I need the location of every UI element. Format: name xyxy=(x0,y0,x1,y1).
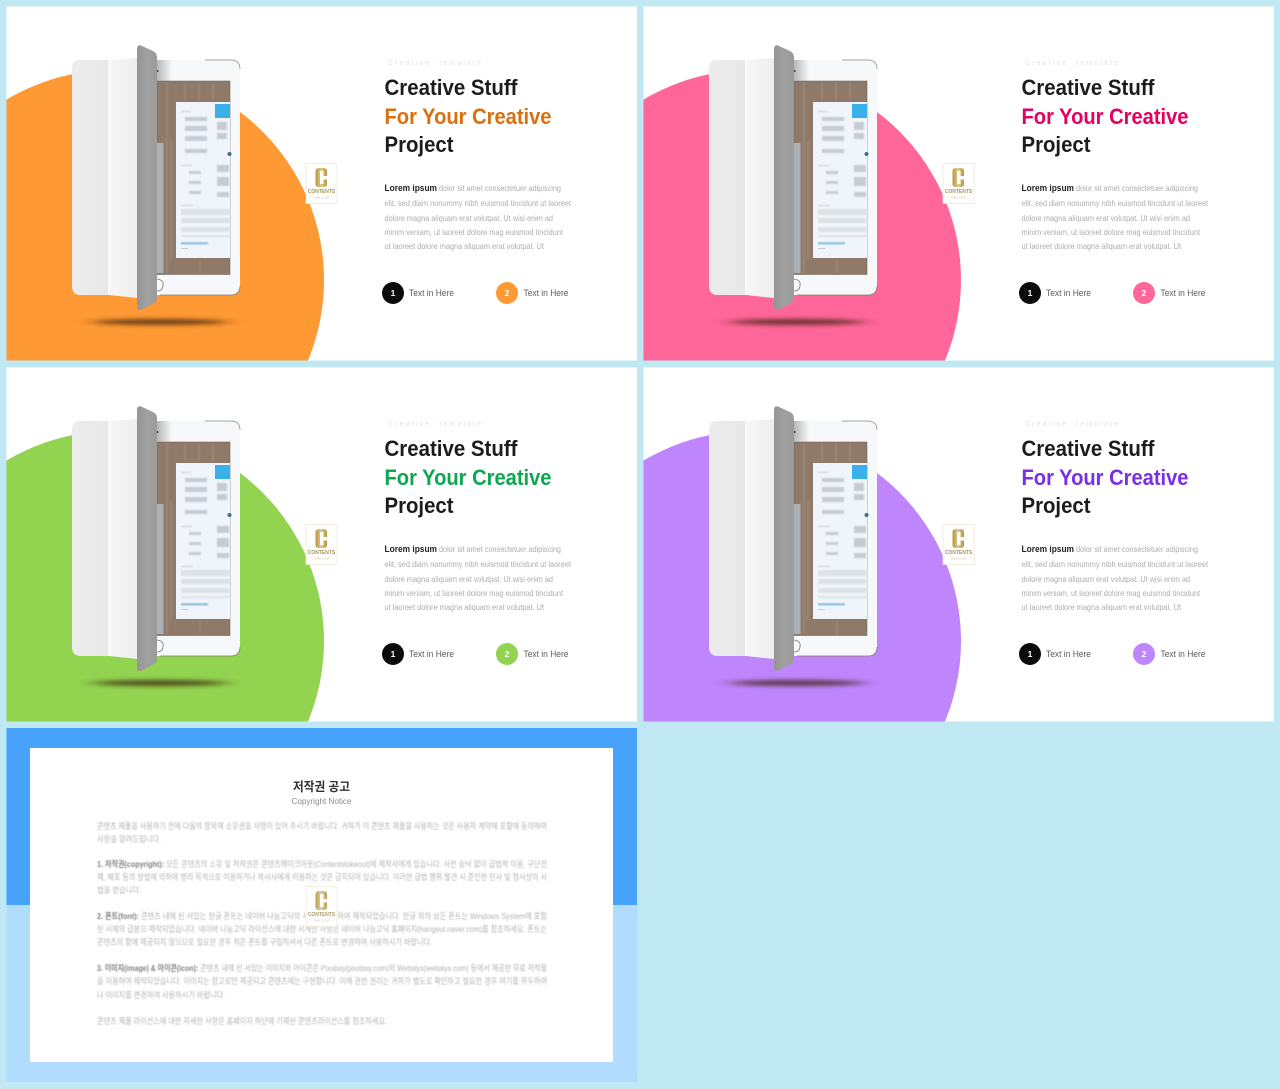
logo badge: CONTENTS xyxy=(308,550,336,556)
item 1: Text in Here xyxy=(409,649,454,659)
item 2 xyxy=(496,643,568,665)
body text: elit, sed diam nonummy nibh euismod tincidunt ut laoreet xyxy=(384,198,572,208)
heading xyxy=(1022,75,1188,157)
logo badge: CONTENTS xyxy=(945,550,973,556)
item 1: Text in Here xyxy=(409,288,454,298)
heading: For Your Creative xyxy=(384,104,552,129)
body text: minim veniam, ut laoreet dolore mag euismod tincidunt xyxy=(384,227,564,237)
item 1: 1 xyxy=(391,649,396,659)
section 1: copyright xyxy=(97,859,547,895)
item 2 xyxy=(496,282,568,304)
heading: Creative Stuff xyxy=(1022,436,1155,461)
section 3: image and icon: 나 이미지를 변경하여 사용하시기 바랍니다. xyxy=(97,990,225,1000)
notice intro: 사항을 알려드립니다. xyxy=(97,834,161,844)
section 2: font xyxy=(97,911,547,947)
body text xyxy=(1022,544,1209,612)
logo badge: MAIL.COM xyxy=(951,556,966,560)
icon: tablet mockup xyxy=(709,406,877,686)
item 2: 2 xyxy=(1142,288,1147,298)
panel: green creative slide xyxy=(6,368,637,722)
section 3: image and icon xyxy=(97,963,547,1000)
logo badge xyxy=(306,886,337,926)
item 2: Text in Here xyxy=(524,649,568,659)
heading: Project xyxy=(384,132,454,157)
heading xyxy=(384,436,552,518)
item 2: 2 xyxy=(505,649,510,659)
heading xyxy=(1022,436,1188,518)
logo badge: MAIL.COM xyxy=(314,918,329,922)
decorative purple circle xyxy=(644,435,961,722)
body text: dolor sit amet consectetuer adipiscing xyxy=(439,544,561,554)
body text: elit, sed diam nonummy nibh euismod tincidunt ut laoreet xyxy=(1022,198,1209,208)
closing note: 콘텐츠 제품 라이선스에 대한 자세한 사항은 홈페이지 하단에 기재된 콘텐츠라이선스를 참조하세요. xyxy=(97,1016,387,1026)
logo badge: CONTENTS xyxy=(308,189,336,195)
notice subtitle: Copyright Notice xyxy=(292,796,352,806)
item 1: 1 xyxy=(1028,288,1033,298)
heading: For Your Creative xyxy=(1022,104,1188,129)
item 1: 1 xyxy=(1028,649,1033,659)
logo badge: MAIL.COM xyxy=(314,556,329,560)
body text: dolore magna aliquam erat volutpat. Ut wisi enim ad xyxy=(384,574,553,584)
body text: dolore magna aliquam erat volutpat. Ut wisi enim ad xyxy=(384,213,553,223)
body text xyxy=(384,183,572,251)
body text xyxy=(1022,183,1209,251)
body text: ut laoreet dolore magna aliquam erat volutpat. Ut xyxy=(384,241,545,251)
logo badge xyxy=(943,524,974,564)
eyebrow label: Creative template xyxy=(388,421,481,428)
item 2 xyxy=(1133,282,1206,304)
section 3: image and icon: 3. 이미지(image) & 아이콘(icon): 콘텐츠 내에 된 서있는 이미지와 아이콘은 Pixabay(pixabay.com)와 Webalys(webalys.com) 등에서 제공한 무료 저작물 xyxy=(97,963,547,973)
heading: For Your Creative xyxy=(384,465,552,490)
decorative green circle xyxy=(6,435,324,722)
notice intro: 콘텐츠 제품을 사용하기 전에 다음의 항목에 소유권을 사항이 있어 주시기 바랍니다. 귀하가 이 콘텐츠 제품을 사용하는 것은 사용자 계약에 포함에 동의하여 xyxy=(97,821,547,831)
section 3: image and icon: 을 이용하여 제작되었습니다. 이미지는 참고로만 제공되고 콘텐츠에는 구현합니다. 이에 관한 권리는 귀하가 별도로 확인하고 필요한 경우 여기를 위두하여 xyxy=(97,976,547,986)
body text: elit, sed diam nonummy nibh euismod tincidunt ut laoreet xyxy=(1022,559,1209,569)
item 1: 1 xyxy=(391,288,396,298)
heading: Project xyxy=(1022,493,1091,518)
heading: Creative Stuff xyxy=(384,75,518,100)
item 1 xyxy=(1019,643,1091,665)
section 2: font: 콘텐츠의 함에 제공되지 않으므로 필요한 경우 적은 폰트를 구입하셔서 다른 폰트로 변경하여 사용하시기 바랍니다. xyxy=(97,937,432,947)
panel: orange creative slide xyxy=(6,6,637,360)
item 2: Text in Here xyxy=(524,288,568,298)
logo badge xyxy=(943,164,974,204)
panel: purple creative slide xyxy=(644,368,1274,722)
section 1: copyright: 1. 저작권(copyright): 모든 콘텐츠의 소유 및 저작권은 콘텐츠메이크아웃(Contentstokeout)에 제작사에게 있습니다. 사전 승낙 없이 급법적 이용, 구단전 xyxy=(97,859,547,869)
icon: tablet mockup xyxy=(72,45,240,325)
body text: dolore magna aliquam erat volutpat. Ut wisi enim ad xyxy=(1022,574,1190,584)
body text: Lorem ipsum xyxy=(1022,544,1074,554)
item 2 xyxy=(1133,643,1206,665)
section 1: copyright: 법을 받습니다. xyxy=(97,885,141,895)
heading xyxy=(384,75,552,157)
item 2: Text in Here xyxy=(1160,288,1206,298)
heading: For Your Creative xyxy=(1022,465,1188,490)
body text: dolor sit amet consectetuer adipiscing xyxy=(1076,544,1198,554)
body text: dolore magna aliquam erat volutpat. Ut wisi enim ad xyxy=(1022,213,1190,223)
panel: copyright notice xyxy=(6,728,637,1082)
logo badge: CONTENTS xyxy=(308,912,336,918)
eyebrow label: Creative template xyxy=(1025,421,1118,428)
heading: Creative Stuff xyxy=(384,436,518,461)
heading: Project xyxy=(384,493,454,518)
notice title: 저작권 공고 xyxy=(293,779,350,794)
body text: ut laoreet dolore magna aliquam erat volutpat. Ut xyxy=(1022,602,1182,612)
decorative pink circle xyxy=(644,74,961,360)
eyebrow label: Creative template xyxy=(1025,60,1118,67)
body text: dolor sit amet consectetuer adipiscing xyxy=(439,183,561,193)
eyebrow label: Creative template xyxy=(388,60,481,67)
icon: tablet mockup xyxy=(709,45,877,325)
item 1 xyxy=(382,643,454,665)
item 2: 2 xyxy=(505,288,510,298)
section 2: font: 2. 폰트(font): 콘텐츠 내에 된 서있는 한글 폰트는 네이버 나눔고딕의 서체를 사용하여 제작되었습니다. 한글 외의 보든 폰트는 Windows System에 포함 xyxy=(97,911,547,921)
logo badge xyxy=(306,164,337,204)
notice intro xyxy=(97,821,547,844)
logo badge: MAIL.COM xyxy=(951,196,966,200)
item 2: 2 xyxy=(1142,649,1147,659)
logo badge: CONTENTS xyxy=(945,189,973,195)
body text: ut laoreet dolore magna aliquam erat volutpat. Ut xyxy=(1022,241,1182,251)
heading: Creative Stuff xyxy=(1022,75,1155,100)
logo badge xyxy=(306,524,337,564)
body text: minim veniam, ut laoreet dolore mag euismod tincidunt xyxy=(1022,588,1201,598)
body text: Lorem ipsum xyxy=(384,183,437,193)
body text: elit, sed diam nonummy nibh euismod tincidunt ut laoreet xyxy=(384,559,572,569)
section 1: copyright: 재, 배포 등의 방법에 의하여 영리 목적으로 이용하거나 복사사에게 이용하는 것은 금지되어 있습니다. 이러한 급법 행위 발견 시 준인한 민사 및 형사상의 사 xyxy=(97,872,547,882)
body text: dolor sit amet consectetuer adipiscing xyxy=(1076,183,1198,193)
body text xyxy=(384,544,572,612)
body text: minim veniam, ut laoreet dolore mag euismod tincidunt xyxy=(384,588,564,598)
body text: Lorem ipsum xyxy=(1022,183,1074,193)
panel: pink creative slide xyxy=(644,6,1274,360)
body text: Lorem ipsum xyxy=(384,544,437,554)
icon: tablet mockup xyxy=(72,406,240,686)
logo badge: MAIL.COM xyxy=(314,196,329,200)
decorative orange circle xyxy=(6,74,324,360)
item 2: Text in Here xyxy=(1160,649,1206,659)
body text: ut laoreet dolore magna aliquam erat volutpat. Ut xyxy=(384,602,545,612)
item 1: Text in Here xyxy=(1046,649,1091,659)
item 1 xyxy=(382,282,454,304)
item 1: Text in Here xyxy=(1046,288,1091,298)
item 1 xyxy=(1019,282,1091,304)
section 2: font: 된 시체의 급분으 제작되었습니다. 네이버 나눔고딕 라이선스에 대한 시계한 사항은 네이버 나눔고딕 홈페이지(hangeul.naver.com)를 참조하세요. 폰트는 xyxy=(97,924,547,934)
body text: minim veniam, ut laoreet dolore mag euismod tincidunt xyxy=(1022,227,1201,237)
heading: Project xyxy=(1022,132,1091,157)
